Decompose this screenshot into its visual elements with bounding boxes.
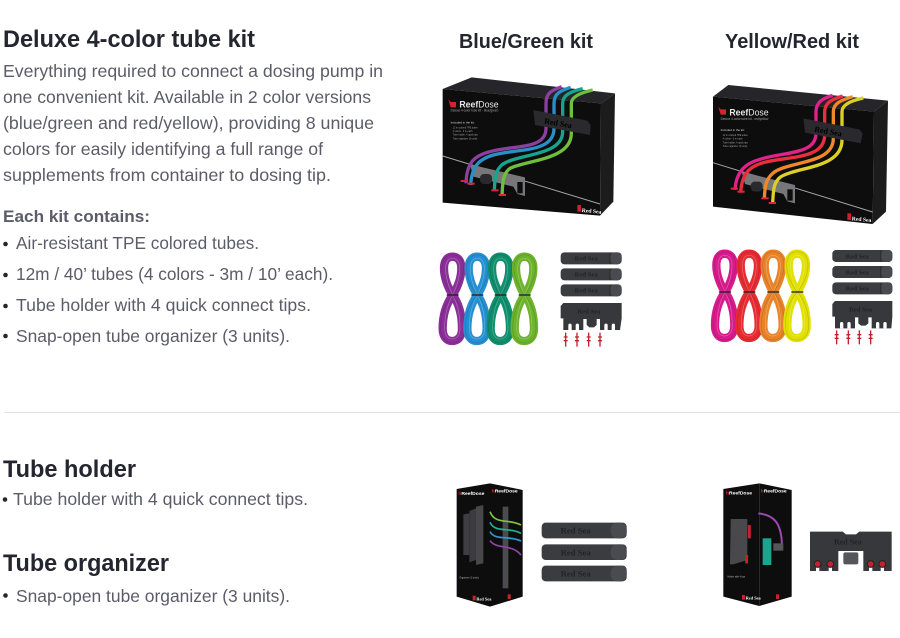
- product box: tube organizer pack: [457, 483, 523, 607]
- kit contents list: Snap-open tube organizer (3 units).: [16, 326, 290, 346]
- tube holder with quick connect tips: Red Sea: [834, 537, 862, 546]
- tube organizers (3 units): Red Sea: [561, 526, 591, 536]
- organizers, holder and tips: blue/green kit: Red Sea: [575, 288, 598, 295]
- intro paragraph: one convenient kit. Available in 2 color versions: [3, 87, 371, 107]
- subheading: each kit contains: Each kit contains:: [3, 207, 150, 226]
- tube coils: yellow/red kit: [713, 252, 809, 340]
- product box: tube organizer pack: hReefDose: [458, 491, 485, 497]
- product box: yellow/red kit: Included in the kit:: [721, 128, 745, 132]
- product box: yellow/red kit: 12 m colored TPE tubes: [723, 134, 748, 137]
- heading: blue/green kit: Blue/Green kit: [459, 31, 593, 53]
- product box: yellow/red kit: Deluxe 4-color tube kit - red/yellow: [721, 117, 769, 121]
- product box: blue/green kit: [443, 77, 615, 216]
- product box: blue/green kit: ReefDose: [459, 100, 499, 110]
- tube organizers (3 units): [542, 523, 627, 581]
- intro paragraph: Everything required to connect a dosing pump in: [3, 61, 383, 81]
- product box: yellow/red kit: 4 colors - 3 m each: [723, 138, 743, 141]
- product box: blue/green kit: Tube holder, 4 quick tips: [453, 134, 479, 137]
- product box: blue/green kit: Red Sea: [581, 208, 602, 216]
- product box: yellow/red kit: ReefDose: [729, 107, 769, 117]
- product box: tube holder pack: Holder with 4 tips: [727, 576, 746, 579]
- product box: yellow/red kit: Red Sea: [814, 125, 843, 138]
- organizers, holder and tips: blue/green kit: Red Sea: [575, 271, 598, 278]
- organizers, holder and tips: yellow/red kit: Red Sea: [846, 269, 869, 276]
- product box: blue/green kit: Tube organizer (3 units): [453, 137, 478, 140]
- product box: yellow/red kit: Red Sea: [851, 216, 872, 224]
- heading: yellow/red kit: Yellow/Red kit: [725, 31, 859, 53]
- heading: deluxe kit: Deluxe 4-color tube kit: [3, 26, 255, 53]
- organizers, holder and tips: yellow/red kit: [832, 250, 892, 344]
- section divider: [4, 412, 900, 413]
- product box: blue/green kit: Red Sea: [544, 116, 573, 130]
- tube holder with quick connect tips: [810, 532, 892, 571]
- kit contents list: Air-resistant TPE colored tubes.: [16, 233, 259, 253]
- product box: blue/green kit: Deluxe 4-color tube kit - blue/green: [451, 109, 498, 113]
- organizers, holder and tips: blue/green kit: [561, 252, 622, 347]
- tube organizers (3 units): Red Sea: [561, 569, 591, 579]
- organizers, holder and tips: yellow/red kit: Red Sea: [846, 253, 869, 260]
- kit contents list: 12m / 40’ tubes (4 colors - 3m / 10’ each).: [16, 264, 333, 284]
- organizers, holder and tips: yellow/red kit: Red Sea: [846, 286, 869, 293]
- intro paragraph: colors for easily identifying a full range of: [3, 139, 323, 159]
- product box: tube holder pack: Red Sea: [746, 596, 762, 601]
- tube organizer bullet: Snap-open tube organizer (3 units).: [16, 586, 290, 606]
- product box: yellow/red kit: Tube holder, 4 quick tips: [723, 141, 749, 144]
- product box: tube holder pack: hReefDose: [761, 488, 787, 494]
- tube holder bullet: Tube holder with 4 quick connect tips.: [13, 489, 308, 509]
- organizers, holder and tips: blue/green kit: Red Sea: [577, 308, 601, 315]
- intro paragraph: (blue/green and red/yellow), providing 8 unique: [3, 113, 374, 133]
- product box: blue/green kit: 12 m colored TPE tubes: [453, 126, 478, 129]
- product box: tube holder pack: [723, 483, 792, 606]
- organizers, holder and tips: blue/green kit: Red Sea: [575, 256, 598, 263]
- intro paragraph: [3, 61, 383, 185]
- kit contents list: [3, 233, 333, 346]
- product box: tube organizer pack: hReefDose: [492, 488, 518, 494]
- product box: tube holder pack: hReefDose: [726, 490, 752, 496]
- product box: tube organizer pack: Organizer (3 units): [459, 576, 479, 579]
- intro paragraph: supplements from container to dosing tip.: [3, 165, 331, 185]
- product box: blue/green kit: 4 colors - 3 m each: [453, 130, 473, 133]
- organizers, holder and tips: yellow/red kit: Red Sea: [849, 307, 873, 314]
- tube coils: blue/green kit: [441, 255, 536, 343]
- product box: yellow/red kit: [713, 85, 888, 224]
- product box: blue/green kit: Included in the kit:: [451, 120, 475, 124]
- heading: tube organizer: Tube organizer: [3, 550, 169, 577]
- kit contents list: Tube holder with 4 quick connect tips.: [16, 295, 311, 315]
- product box: yellow/red kit: Tube organizer (3 units): [723, 145, 748, 148]
- product box: tube organizer pack: Red Sea: [476, 596, 492, 601]
- heading: tube holder: Tube holder: [3, 456, 136, 483]
- tube organizers (3 units): Red Sea: [561, 547, 591, 557]
